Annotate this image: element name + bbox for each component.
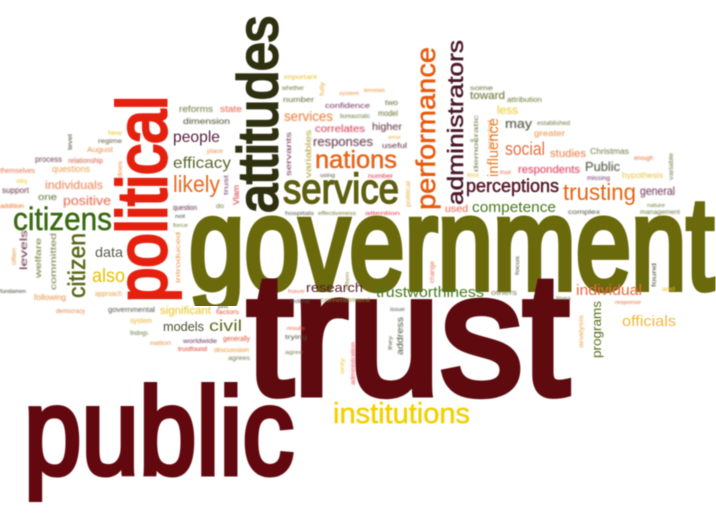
small words: top cluster: hospitals (285, 211, 315, 217)
small words: left cluster: positive (63, 193, 111, 208)
small words: around trust: administration (351, 342, 357, 385)
word: civil: civil (209, 318, 242, 335)
small words: around trust: have (288, 289, 305, 295)
small words: left cluster: question (173, 205, 197, 212)
small words: around trust: commitment (320, 298, 371, 304)
small words: left cluster: questions (52, 164, 90, 174)
small words: left cluster: worldwide (182, 339, 218, 345)
small words: around trust: trying (285, 335, 307, 341)
word: citizens: citizens (13, 201, 112, 237)
small words: left cluster: generally (223, 336, 250, 343)
main word: trust: trust (247, 237, 569, 431)
small words: right cluster: enough (634, 156, 653, 162)
small words: left cluster: often (12, 248, 18, 265)
small words: left cluster: introduced (176, 232, 182, 283)
small words: right cluster: Christmas (590, 147, 629, 156)
word: efficacy: efficacy (173, 155, 231, 172)
small words: left cluster: significant (160, 305, 211, 317)
small words: left cluster: committed (49, 233, 58, 290)
small words: top cluster: political (406, 181, 412, 207)
small words: left cluster: system (130, 318, 152, 325)
small words: top cluster: some (470, 86, 494, 92)
word: performance: performance (411, 47, 441, 210)
word: programs: programs (589, 300, 604, 358)
small words: right cluster: greater (534, 129, 565, 138)
small words: left cluster: addition (0, 204, 24, 210)
small words: left cluster: do (216, 204, 225, 210)
small words: top cluster: fully (320, 82, 326, 96)
small words: around trust: focus (515, 255, 521, 275)
word: trusting: trusting (563, 179, 636, 205)
small words: around trust: results (287, 326, 306, 332)
small words: right cluster: complex (568, 210, 600, 216)
small words: left cluster: following (34, 293, 66, 302)
small words: around trust: often (345, 272, 351, 290)
small words: left cluster: support (2, 186, 30, 195)
small words: left cluster: reforms (179, 104, 214, 114)
small words: right cluster: nature (647, 203, 665, 209)
small words: left cluster: democracy (56, 309, 85, 315)
small words: left cluster: factors (216, 310, 239, 316)
word: service: service (283, 165, 399, 212)
main word: attitudes: attitudes (226, 16, 289, 213)
small words: right cluster: variable (669, 152, 675, 180)
small words: around trust (285, 255, 675, 385)
word: data: data (95, 244, 123, 260)
small words: left cluster: one (38, 192, 57, 202)
small words: top cluster: number (283, 97, 315, 104)
small words: right cluster (470, 90, 680, 216)
small words: top cluster: two (385, 100, 398, 107)
small words: top cluster: effectiveness (318, 211, 357, 217)
small words: around trust: they (388, 335, 394, 350)
small words: around trust: response (615, 300, 641, 306)
small words: left cluster: findings (130, 331, 148, 337)
small words: left cluster: individuals (45, 178, 103, 192)
small words: left cluster: August (87, 147, 113, 154)
small words: left cluster: fundamen (0, 289, 26, 295)
word: important: important (284, 75, 317, 81)
small words: left cluster: voting (16, 179, 27, 185)
small words: left cluster: force (173, 223, 188, 229)
small words: left cluster: discussion (214, 348, 249, 354)
word: others: others (491, 290, 518, 297)
small words: top cluster: model (378, 109, 398, 118)
small words: top cluster: useful (382, 143, 408, 150)
small words: left cluster: New (108, 131, 123, 137)
small words: around trust: lines (556, 296, 572, 302)
main word: public: public (24, 364, 294, 501)
small words: left cluster: state (220, 104, 242, 114)
small words: left cluster: themselves (0, 168, 35, 175)
small words: around trust: found (652, 263, 658, 287)
word: institutions: institutions (333, 398, 470, 430)
word: trustworthiness: trustworthiness (376, 284, 484, 301)
word: research: research (306, 280, 363, 295)
small words: right cluster: general (640, 184, 675, 198)
small words: top cluster: and (470, 138, 478, 144)
small words: top cluster: sense (388, 135, 401, 141)
small words: left cluster: levels (19, 230, 30, 270)
small words: left cluster: dimension (183, 117, 230, 126)
word: models: models (163, 319, 204, 334)
medium words (13, 40, 676, 430)
small words: around trust: issue (390, 307, 405, 313)
small words: left cluster: nation (150, 341, 171, 347)
word: nations: nations (315, 146, 397, 174)
small words: top cluster: correlates (315, 124, 365, 135)
small words: right cluster: missing (587, 176, 610, 182)
small words: right cluster: less (497, 103, 518, 117)
small words: top cluster: terrorism (364, 88, 385, 94)
word: also: also (92, 266, 125, 287)
small words: left cluster: regime (98, 139, 123, 145)
small words: around trust: agree (285, 350, 303, 356)
small words: right cluster: studies (550, 148, 587, 160)
word: influence: influence (485, 118, 502, 177)
small words: right cluster: respondents (518, 164, 581, 176)
small words: right cluster: attribution (507, 97, 542, 104)
small words: around trust: only (340, 357, 346, 374)
small words: left cluster: not (175, 214, 186, 220)
small words: top cluster: system (339, 91, 359, 97)
small words: top cluster (281, 75, 494, 217)
small words: top cluster: social (488, 120, 494, 150)
small words: around trust: change (430, 260, 436, 283)
word: social: social (505, 139, 545, 159)
small words: left cluster: approach (95, 291, 122, 298)
word: perceptions: perceptions (466, 176, 559, 196)
small words: left cluster: place (207, 149, 224, 155)
small words: top cluster: bureaucratic (340, 114, 370, 120)
small words: left cluster: trustfound (178, 347, 207, 353)
small words: top cluster: whether (281, 86, 304, 92)
small words: around trust: address (395, 316, 405, 355)
small words: top cluster: less (467, 173, 479, 179)
small words: top cluster: using (320, 173, 335, 179)
word: administrators: administrators (443, 40, 468, 205)
small words: top cluster: responses (313, 134, 373, 149)
small words: right cluster: trust (500, 170, 512, 176)
small words: right cluster: may (505, 116, 533, 131)
small words: top cluster: attention (365, 211, 400, 217)
small words: top cluster: democratic (474, 115, 480, 172)
small words: right cluster: management (640, 210, 680, 216)
small words: top cluster: variables (304, 130, 313, 178)
word: process: process (35, 155, 62, 164)
small words: around trust: federal (290, 299, 310, 305)
word: toward: toward (470, 90, 505, 102)
small words: left cluster: does (118, 161, 124, 178)
small words: left cluster: level (68, 134, 74, 150)
small words: right cluster: hypothesis (622, 171, 663, 180)
small words: left cluster (0, 104, 250, 362)
word: competence: competence (472, 199, 556, 216)
small words: right cluster: established (537, 121, 570, 127)
main word: political: political (103, 96, 181, 302)
word: individual: individual (576, 282, 642, 299)
small words: around trust: and (662, 287, 675, 293)
small words: left cluster: governmental (108, 307, 155, 314)
word: likely: likely (173, 171, 220, 197)
small words: left cluster: agrees (228, 356, 250, 362)
small words: top cluster: higher (372, 122, 403, 133)
word: people: people (173, 129, 220, 146)
small words: top cluster: servants (286, 131, 293, 176)
small words: top cluster: used (445, 204, 468, 215)
small words: left cluster: welfare (34, 237, 43, 280)
small words: top cluster: confidence (325, 103, 370, 110)
small words: left cluster: relationship (68, 158, 103, 165)
small words: left cluster: just (217, 304, 228, 310)
small words: around trust: analysis (579, 315, 585, 348)
small words: top cluster: number (368, 174, 393, 180)
small words: top cluster: services (284, 108, 333, 124)
word: citizen: citizen (64, 233, 91, 298)
word: officials: officials (622, 313, 676, 330)
small words: right cluster: Public (585, 159, 620, 174)
small words: left cluster: trust (224, 174, 230, 195)
small words: left cluster: Vlam (232, 185, 241, 205)
